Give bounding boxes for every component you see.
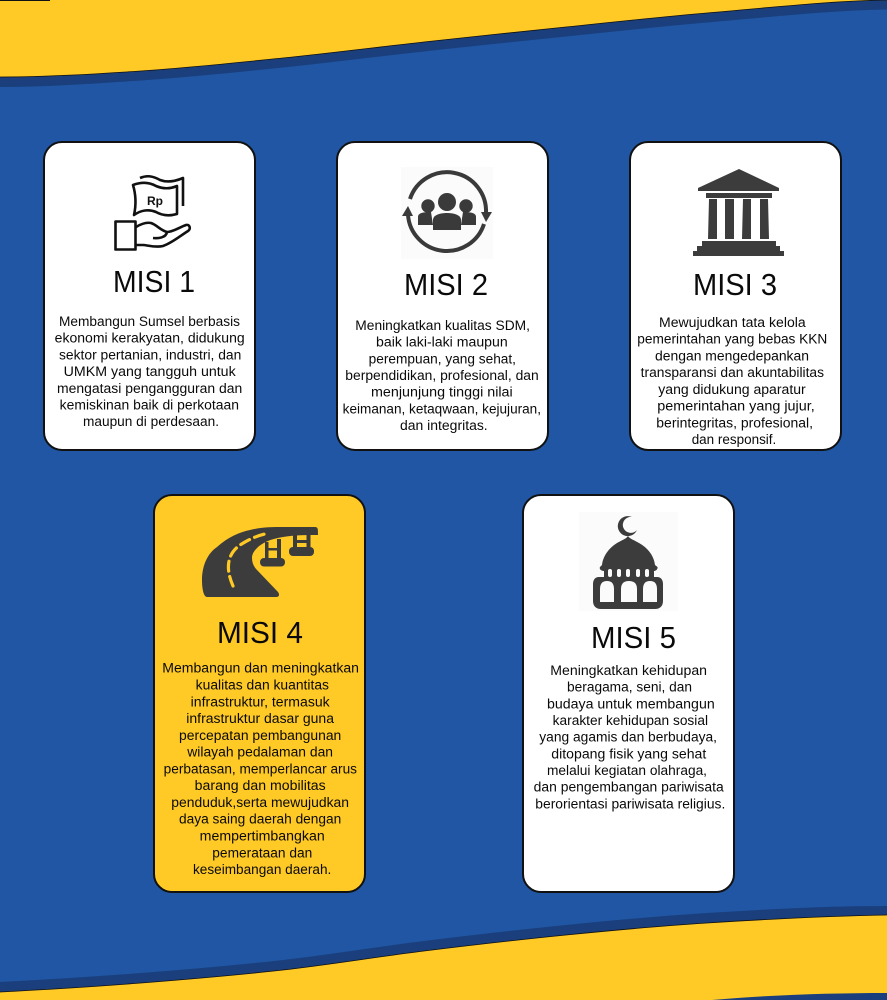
text: misi 4: daya saing daerah dengan: [179, 812, 341, 827]
text: misi 4: wilayah pedalaman dan: [186, 745, 333, 760]
text: misi 4: kualitas dan kuantitas: [196, 678, 329, 692]
text: misi 4: Membangun dan meningkatkan: [162, 661, 359, 676]
text: misi 4: infrastruktur, termasuk: [191, 694, 330, 709]
icon: government building: [693, 169, 784, 256]
text: misi 5: yang agamis dan berbudaya,: [539, 730, 717, 745]
text: misi 3: dengan mengedepankan: [655, 348, 809, 364]
text: misi 1: kemiskinan baik di perkotaan: [60, 398, 239, 412]
text: misi 4: penduduk,serta mewujudkan: [171, 795, 349, 810]
text: misi 3: [637, 315, 827, 447]
text: misi 5: ditopang fisik yang sehat: [551, 746, 707, 761]
text: misi 1: mengatasi pengangguran dan: [57, 381, 242, 396]
text: misi 1: sektor pertanian, industri, dan: [59, 347, 241, 362]
text: misi 5: melalui kegiatan olahraga,: [547, 763, 707, 778]
text: misi 2: menjunjung tinggi nilai: [371, 385, 513, 400]
heading: misi 4: MISI 4: [217, 615, 303, 650]
text: misi 1: Membangun Sumsel berbasis: [59, 314, 240, 329]
text: misi 1: UMKM yang tangguh untuk: [64, 364, 236, 379]
icon: road and bridge: [202, 527, 318, 597]
text: misi 4: pemerataan dan: [212, 845, 312, 860]
icon: hand holding rupiah note: [114, 175, 192, 251]
text: misi 4: barang dan mobilitas: [195, 778, 326, 793]
panel: misi 2: [336, 141, 549, 451]
text: misi 4: perbatasan, memperlancar arus: [164, 761, 357, 776]
panel: misi 4: [153, 494, 366, 893]
text: misi 3: pemerintahan yang bebas KKN: [637, 332, 827, 347]
text: misi 5: karakter kehidupan sosial: [553, 713, 708, 728]
text: misi 5: dan pengembangan pariwisata: [534, 780, 724, 795]
text: misi 2: berpendidikan, profesional, dan: [345, 368, 539, 383]
text: misi 4: keseimbangan daerah.: [193, 862, 331, 877]
text: misi 4: mempertimbangkan: [200, 828, 325, 844]
text: misi 3: dan responsif.: [692, 432, 776, 447]
text: misi 2: [343, 318, 541, 433]
text: misi 4: [162, 661, 359, 877]
text: misi 1: maupun di perdesaan.: [83, 414, 219, 429]
text: misi 2: Meningkatkan kualitas SDM,: [355, 318, 530, 333]
text: misi 3: yang didukung aparatur: [658, 382, 806, 397]
text: misi 5: berorientasi pariwisata religius.: [535, 796, 725, 811]
panel: misi 5: [522, 494, 735, 893]
text: misi 5: beragama, seni, dan: [567, 680, 692, 695]
icon: people cycle: [402, 170, 492, 253]
text: misi 3: Mewujudkan tata kelola: [659, 315, 806, 330]
text: misi 4: infrastruktur dasar guna: [186, 711, 335, 726]
icon: mosque: [593, 516, 663, 609]
heading: misi 3: MISI 3: [693, 267, 777, 302]
text: misi 2: keimanan, ketaqwaan, kejujuran,: [343, 401, 541, 416]
heading: misi 5: MISI 5: [591, 620, 676, 655]
top wave: [0, 0, 887, 87]
text: misi 1: [55, 314, 245, 429]
text: misi 2: baik laki-laki maupun: [376, 335, 508, 350]
text: misi 5: budaya untuk membangun: [547, 696, 715, 711]
text: misi 5: [534, 663, 725, 812]
text: misi 2: dan integritas.: [400, 418, 488, 433]
heading: misi 2: MISI 2: [404, 267, 488, 302]
text: misi 3: transparansi dan akuntabilitas: [641, 365, 824, 380]
text: misi 2: perempuan, yang sehat,: [369, 351, 516, 366]
heading: misi 1: MISI 1: [113, 264, 195, 299]
text: misi 5: Meningkatkan kehidupan: [550, 663, 707, 678]
text: misi 1: ekonomi kerakyatan, didukung: [55, 331, 245, 346]
panel: misi 3: [629, 141, 842, 451]
bottom wave: [0, 906, 887, 1000]
text: misi 3: berintegritas, profesional,: [656, 416, 813, 430]
icon: hand holding rupiah note: Rp: [147, 194, 163, 208]
text: misi 3: pemerintahan yang jujur,: [657, 399, 815, 414]
panel: misi 1: [43, 141, 256, 451]
text: misi 4: percepatan pembangunan: [179, 728, 341, 743]
